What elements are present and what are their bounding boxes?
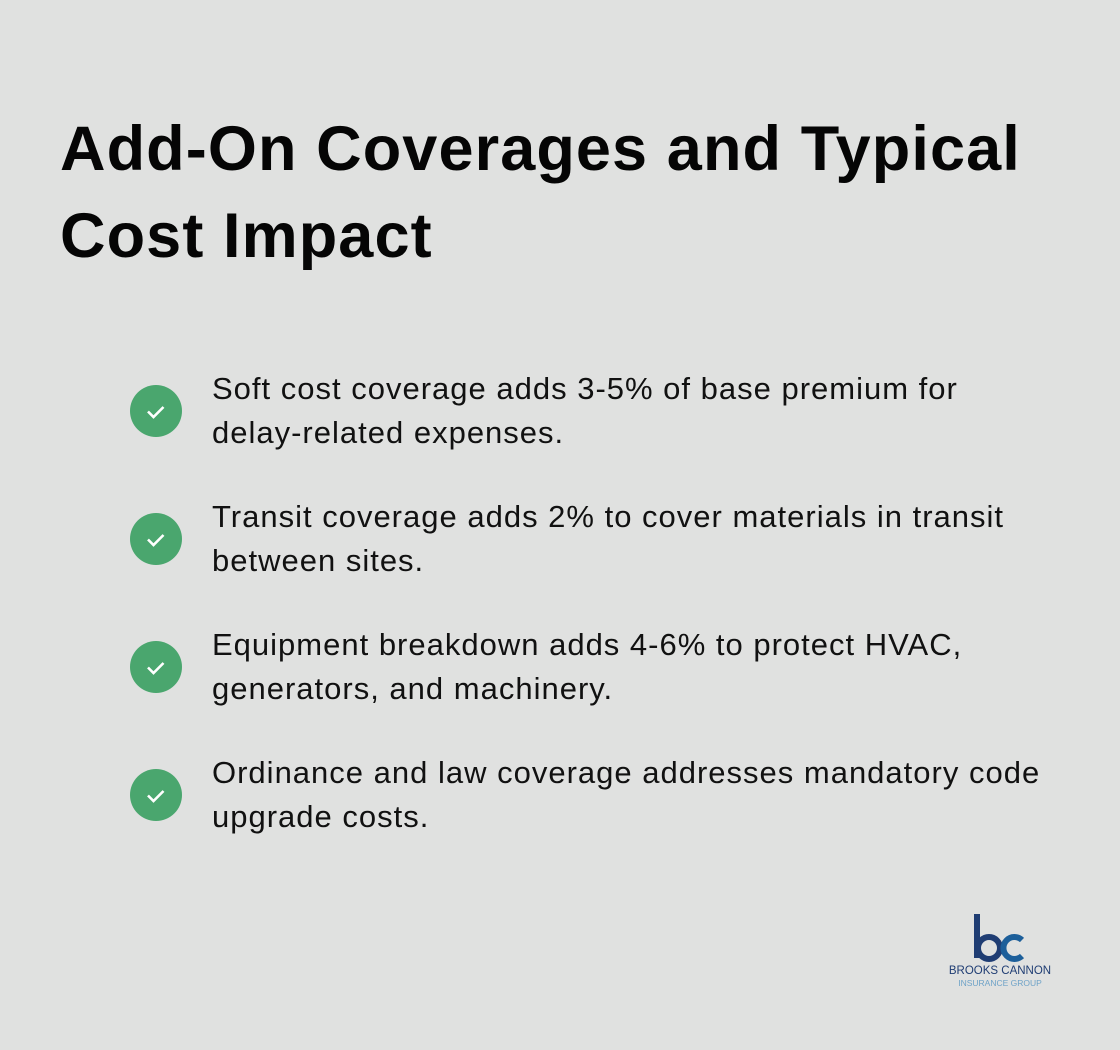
text <box>212 371 958 450</box>
item: transit <box>130 499 1004 578</box>
text: Soft cost coverage adds 3-5% of base premium for <box>212 371 958 406</box>
text: generators, and machinery. <box>212 671 613 706</box>
icon: check <box>130 385 182 437</box>
text <box>212 755 1040 834</box>
text <box>212 499 1004 578</box>
title <box>60 114 1021 271</box>
item: ordinance <box>130 755 1040 834</box>
item: equipment <box>130 627 962 706</box>
title: Cost Impact <box>60 201 433 271</box>
icon: check <box>130 769 182 821</box>
item: soft cost <box>130 371 958 450</box>
text: upgrade costs. <box>212 799 429 834</box>
logo <box>949 914 1051 988</box>
logo: BROOKS CANNON <box>949 965 1051 977</box>
text: Ordinance and law coverage addresses mandatory code <box>212 755 1040 790</box>
icon: check <box>130 513 182 565</box>
text: Transit coverage adds 2% to cover materials in transit <box>212 499 1004 534</box>
icon: check <box>130 641 182 693</box>
logo: INSURANCE GROUP <box>958 978 1042 988</box>
text: between sites. <box>212 543 424 578</box>
text: Equipment breakdown adds 4-6% to protect HVAC, <box>212 627 962 662</box>
text: delay-related expenses. <box>212 415 564 450</box>
title: Add-On Coverages and Typical <box>60 114 1021 184</box>
text <box>212 627 962 706</box>
